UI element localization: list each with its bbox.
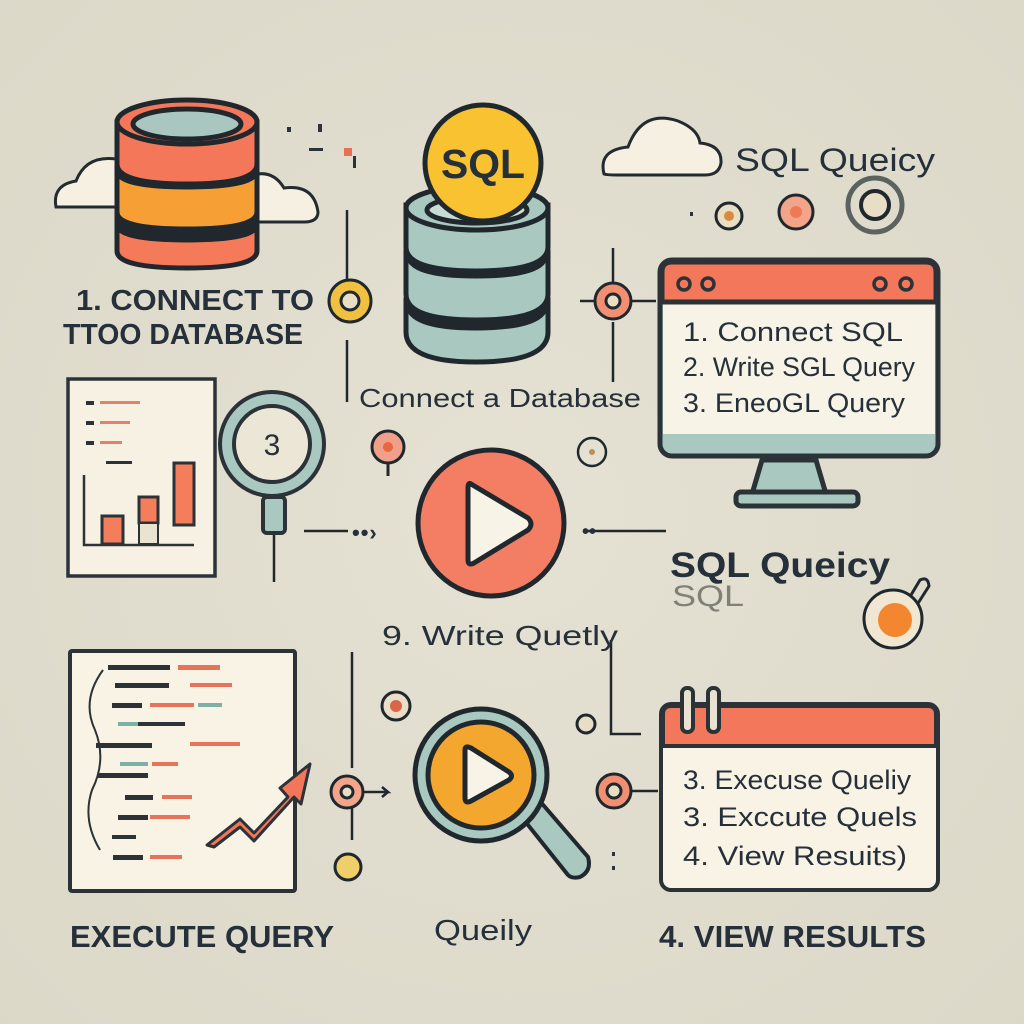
panel: results window: 3. Execuse Queliy [683, 765, 912, 795]
panel: results window [661, 688, 938, 890]
icon: clouds behind left database [55, 158, 318, 222]
arrow: to play button: ••› [352, 520, 378, 545]
icon: magnifier with 3: 3 [264, 429, 280, 462]
label: query: Queily [434, 915, 533, 947]
panel: report chart [68, 379, 215, 576]
icons: small top right dots [716, 178, 902, 232]
heading: connect to database: TTOO DATABASE [63, 319, 303, 351]
label: view results: 4. VIEW RESULTS [659, 919, 926, 954]
label: faded SQL: SQL [672, 580, 744, 613]
panel: monitor with steps: 3. EneoGL Query [683, 388, 906, 418]
icon: orange medal [864, 579, 929, 648]
icon: yellow node [329, 280, 371, 322]
heading: connect to database: 1. CONNECT TO [76, 285, 314, 317]
panel: monitor with steps: 2. Write SGL Query [683, 352, 915, 382]
panel: monitor with steps: 1. Connect SQL [683, 317, 903, 347]
panel: code sheet [70, 651, 295, 891]
icon: small hollow dot [578, 438, 606, 466]
label: SQL query top right: SQL Queicy [735, 142, 935, 178]
icon: red node [595, 283, 631, 319]
icon: small pin [372, 431, 404, 476]
icon: cloud top right [603, 118, 721, 175]
icon: rising arrow [207, 764, 310, 847]
icon: orange database [117, 100, 257, 268]
connector lines [274, 210, 666, 840]
icon: teal database with SQL badge: SQL [441, 141, 525, 187]
icon: teal database with SQL badge [406, 105, 548, 362]
icon: orange play magnifier [415, 709, 589, 878]
panel: monitor with steps [660, 260, 938, 506]
decorative specks [287, 124, 693, 870]
label: SQL query middle right: SQL Queicy [670, 546, 891, 585]
label: write query: 9. Write Quetly [382, 620, 618, 651]
icon: magnifier with 3 [220, 392, 324, 533]
icon: play button [418, 450, 564, 596]
heading: connect to database [63, 285, 314, 351]
label: execute query: EXECUTE QUERY [70, 919, 334, 954]
panel: results window: 3. Exccute Quels [683, 802, 917, 832]
panel: results window: 4. View Resuits) [683, 841, 907, 871]
icon: lower nodes [331, 692, 631, 880]
arrow: from play button: •• [582, 521, 596, 543]
label: connect a database: Connect a Database [359, 383, 641, 413]
